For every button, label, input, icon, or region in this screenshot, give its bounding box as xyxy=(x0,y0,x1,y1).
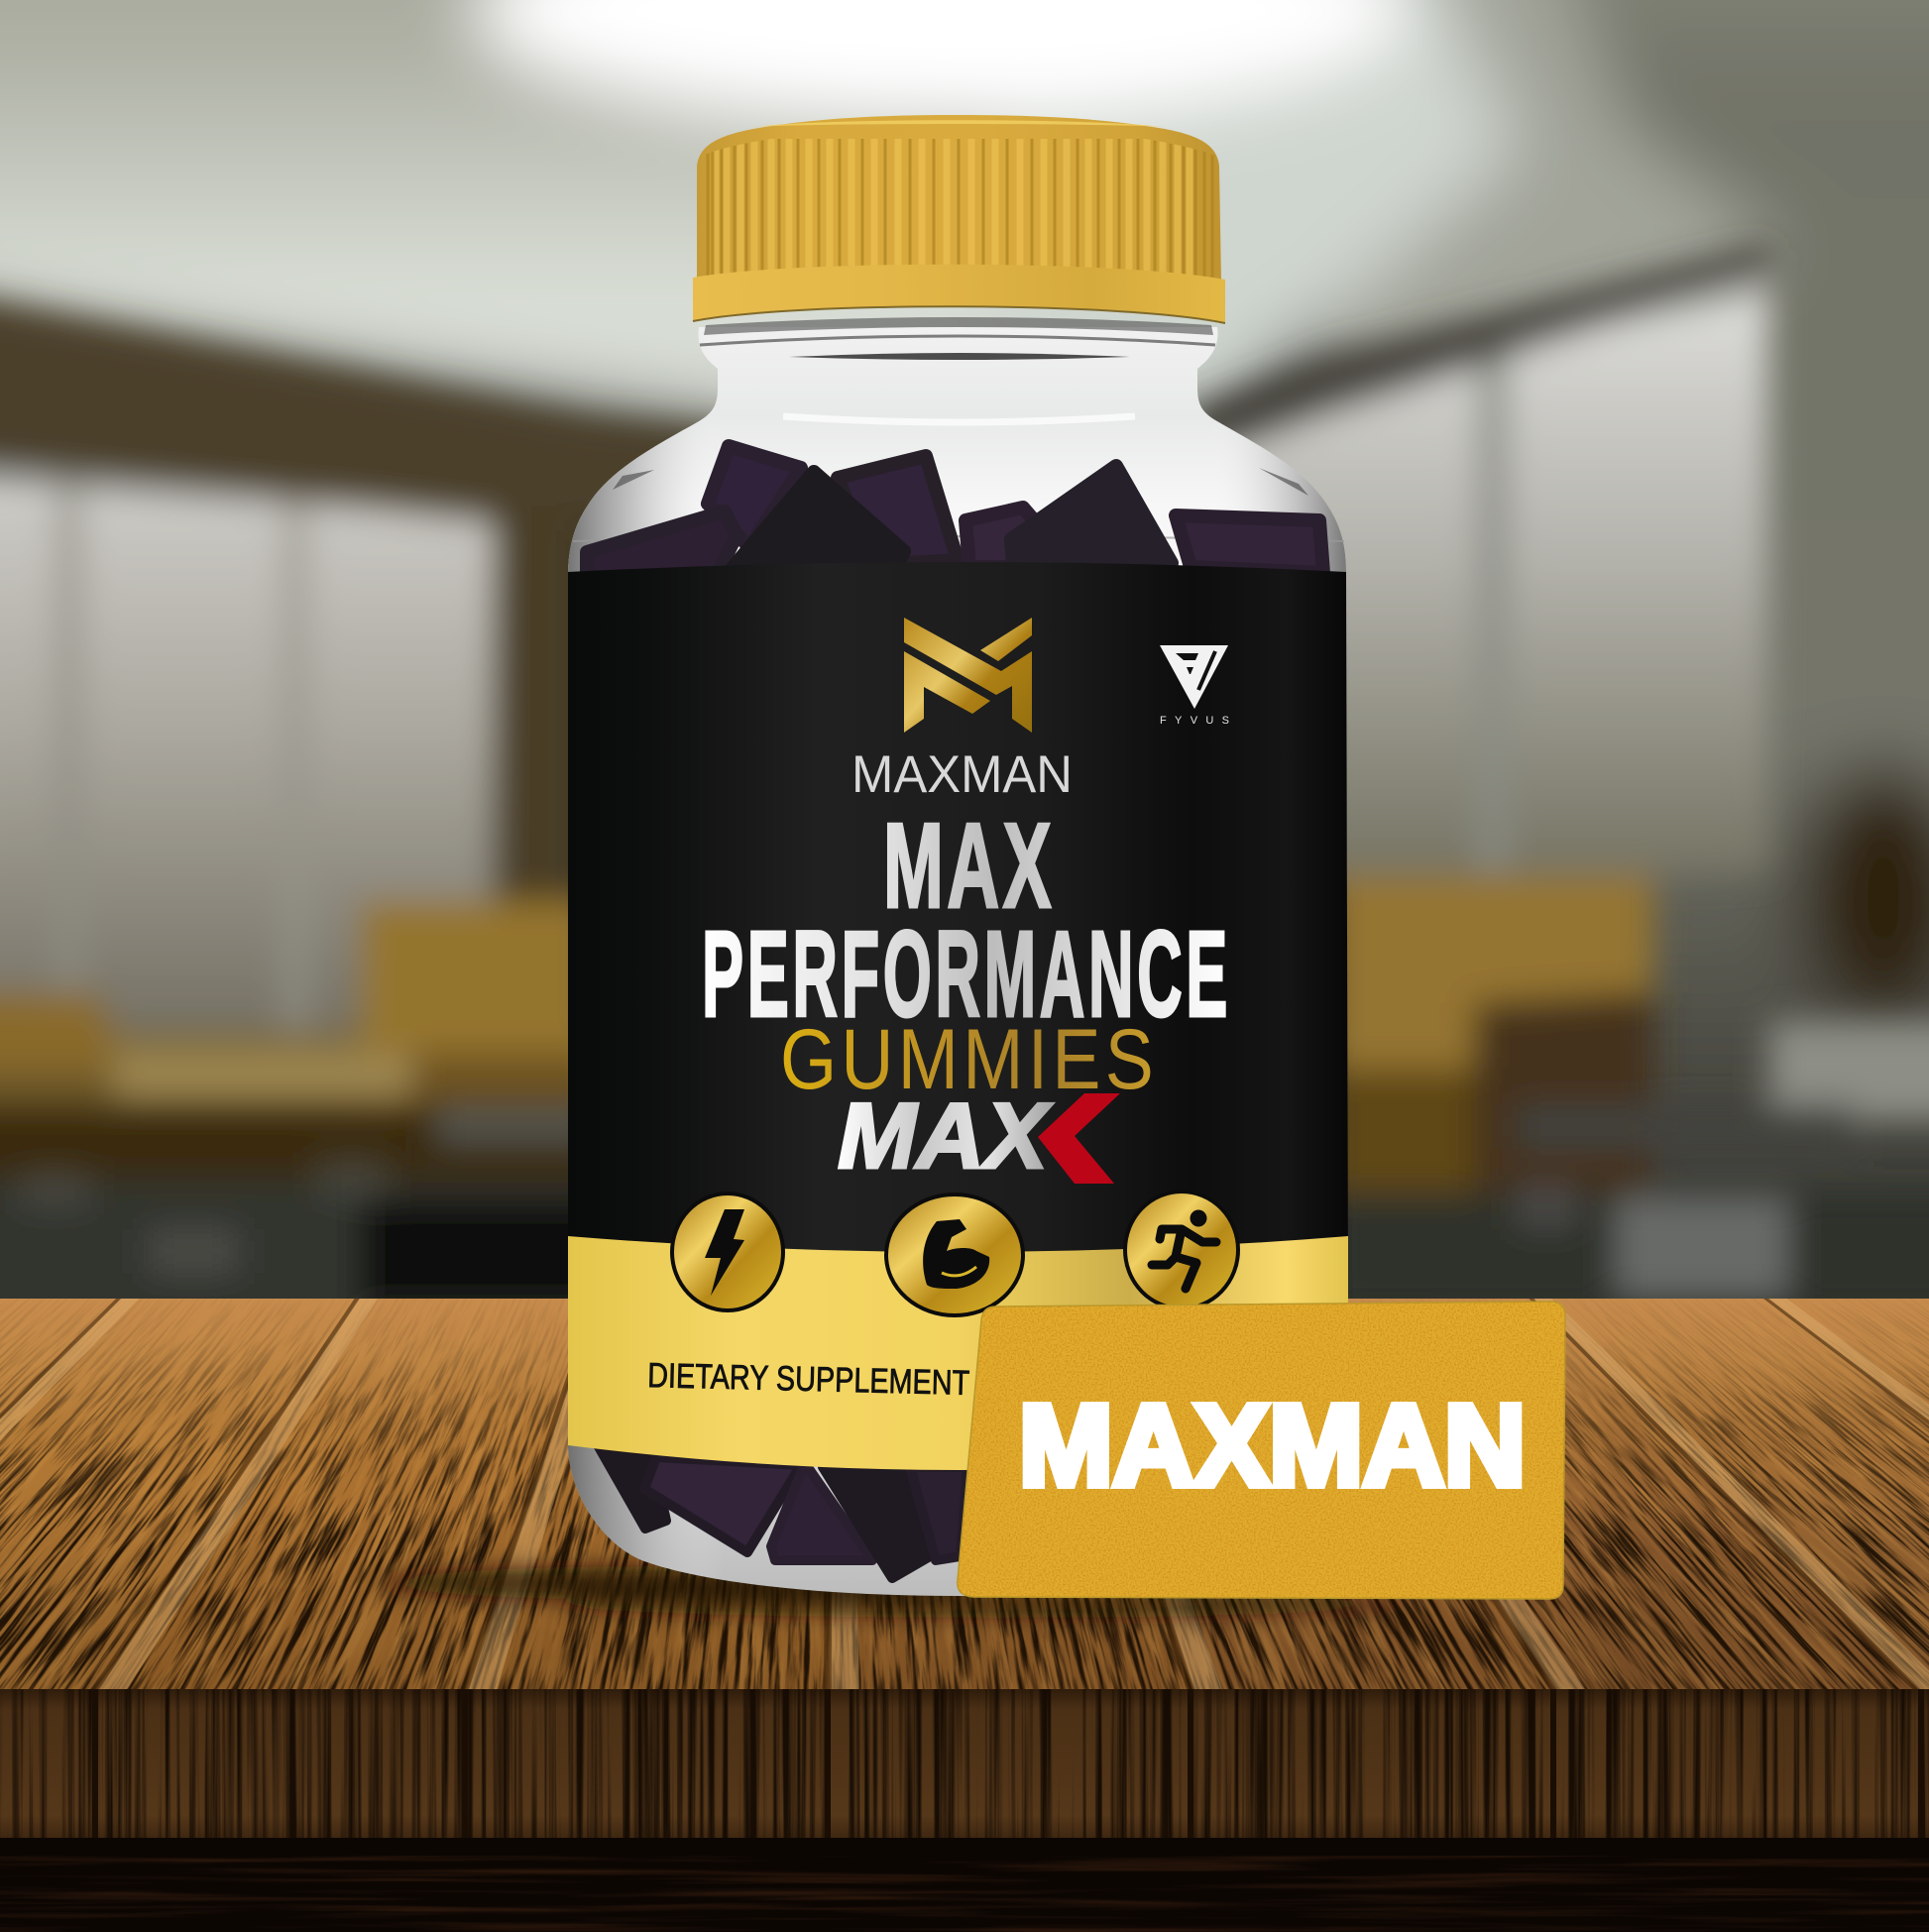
Fyvus logo xyxy=(1160,645,1229,727)
icon: runner medal xyxy=(1125,1192,1238,1308)
headline PERFORMANCE: PERFORMANCE xyxy=(702,907,1231,1043)
blurred room background xyxy=(0,0,1929,1299)
jar shadow on table xyxy=(377,1566,1418,1618)
label text dietary supplement: DIETARY SUPPLEMENT xyxy=(647,1356,970,1403)
Fyvus logo: FYVUS xyxy=(1160,715,1229,727)
product scene xyxy=(372,115,1566,1632)
gold Maxman card xyxy=(952,1297,1571,1604)
brand name MAXMAN: MAXMAN xyxy=(851,745,1073,804)
glass jar body xyxy=(568,317,1348,1596)
table front edge and dark underside xyxy=(0,1689,1929,1932)
MAX italic logo with red chevron: MAX xyxy=(838,1083,1053,1188)
bottle cap xyxy=(693,115,1225,323)
headline MAX: MAX xyxy=(883,798,1055,933)
gummies visible above label xyxy=(587,446,1323,580)
icon: flexed arm medal xyxy=(886,1194,1023,1315)
label black upper section xyxy=(568,562,1348,1289)
icon: energy bolt medal xyxy=(672,1193,783,1310)
gummies visible below label xyxy=(597,1443,967,1578)
wooden table top planks xyxy=(0,1299,1929,1689)
gold Maxman card: MAXMAN xyxy=(1019,1381,1526,1510)
label gold lower band xyxy=(568,1236,1348,1470)
Maxman gold M logo xyxy=(904,618,1032,733)
headline GUMMIES: GUMMIES xyxy=(780,1012,1158,1107)
